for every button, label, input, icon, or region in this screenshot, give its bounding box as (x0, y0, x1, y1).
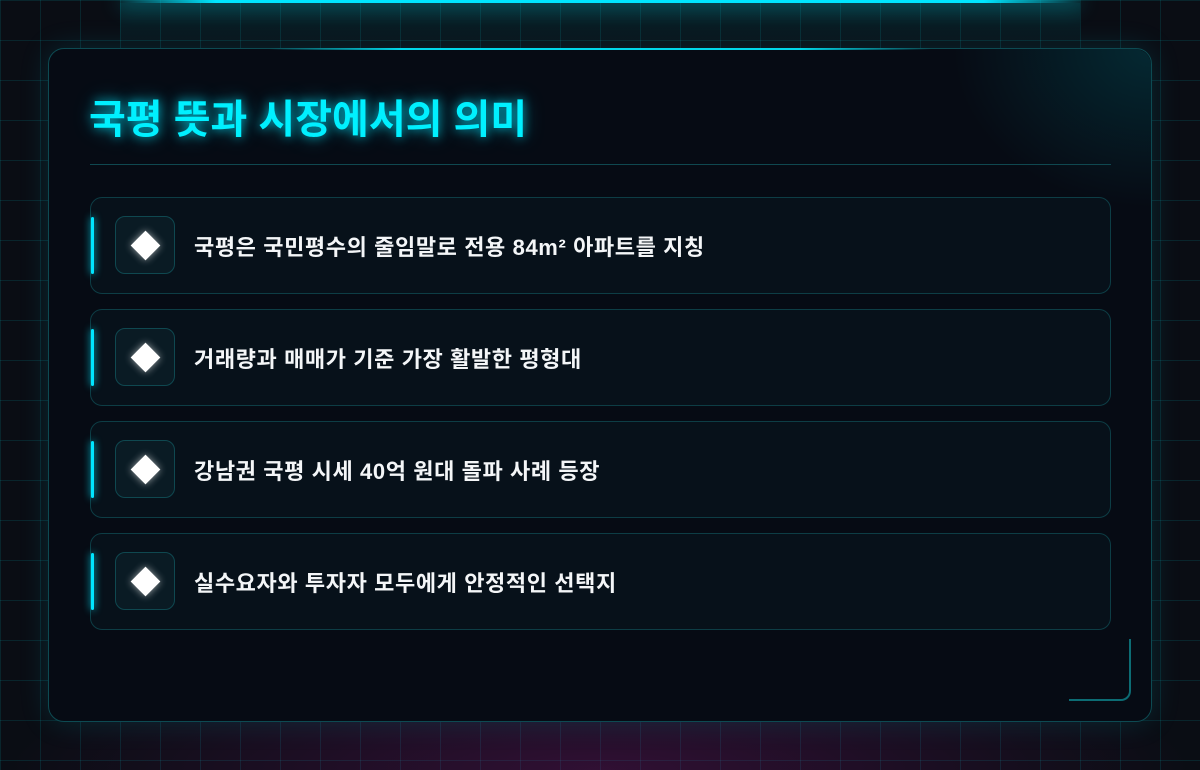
item 4: 실수요자와 투자자 모두에게 안정적인 선택지 (194, 571, 617, 596)
item 3: 강남권 국평 시세 40억 원대 돌파 사례 등장 (194, 459, 600, 484)
icon: diamond (115, 216, 175, 274)
item 2: 거래량과 매매가 기준 가장 활발한 평형대 (194, 347, 582, 372)
item 1 (90, 197, 1111, 294)
title: 국평 뜻과 시장에서의 의미 (89, 98, 527, 142)
item 4 (90, 533, 1111, 630)
item 1: 국평은 국민평수의 줄임말로 전용 84m² 아파트를 지칭 (194, 235, 705, 260)
icon: diamond (115, 440, 175, 498)
icon: diamond (115, 328, 175, 386)
corner bracket (1069, 639, 1131, 701)
item 3 (90, 421, 1111, 518)
item 2 (90, 309, 1111, 406)
icon: diamond (115, 552, 175, 610)
